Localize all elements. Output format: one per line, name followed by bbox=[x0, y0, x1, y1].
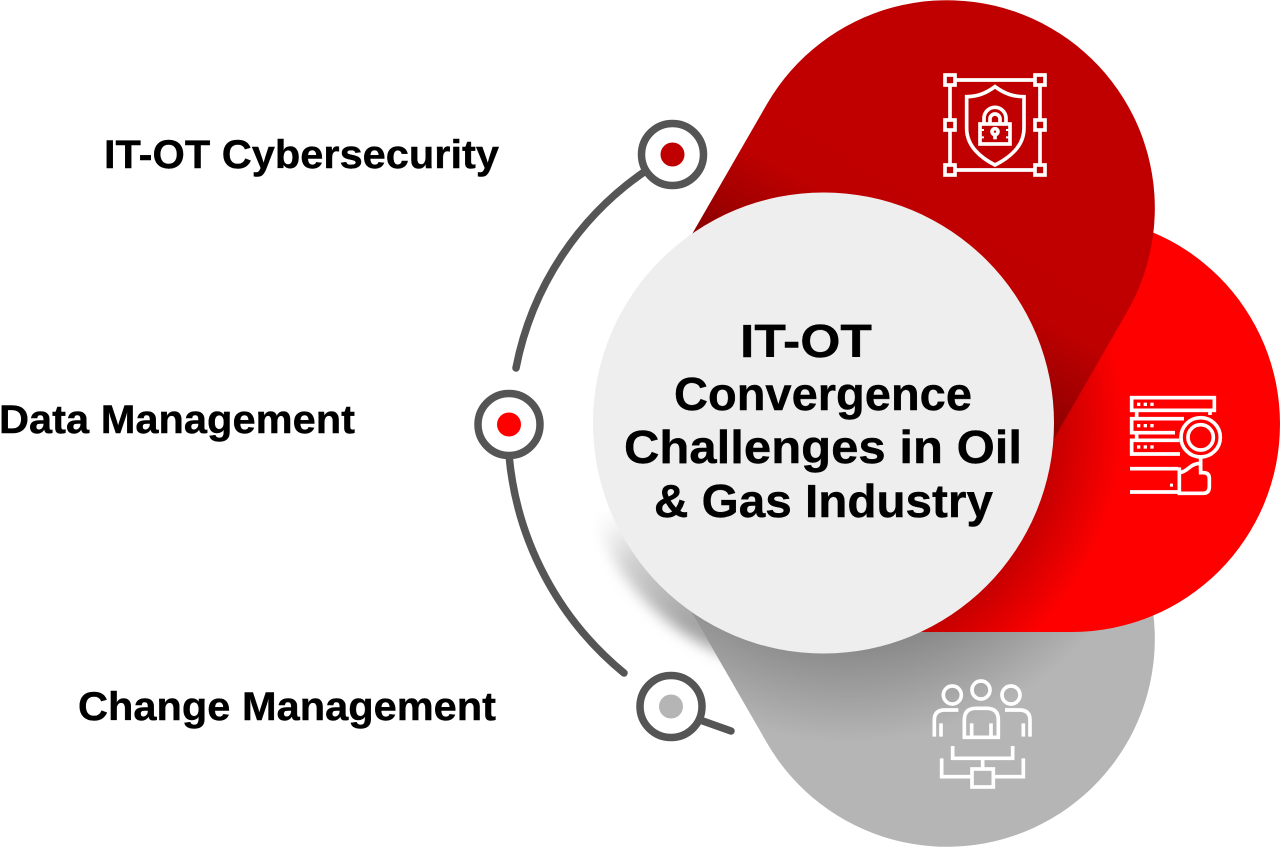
central circle shadow bbox=[604, 522, 720, 662]
marker: change management bbox=[640, 676, 702, 738]
connector arc: upper bbox=[516, 170, 647, 368]
title: Convergence bbox=[674, 368, 972, 420]
title bbox=[624, 315, 1022, 527]
icon: shield with lock bbox=[945, 75, 1045, 175]
panel: central circle bbox=[593, 192, 1054, 654]
label: IT-OT Cybersecurity: IT-OT Cybersecurity bbox=[104, 133, 500, 177]
panel: bright red capsule bbox=[880, 216, 1280, 632]
marker: data management bbox=[478, 394, 540, 456]
connector arc: lower bbox=[509, 455, 624, 673]
label: Change Management: Change Management bbox=[78, 685, 496, 729]
marker: cybersecurity bbox=[642, 124, 704, 186]
title: Challenges in Oil bbox=[624, 421, 1022, 473]
panel: dark red capsule bbox=[680, 0, 1155, 463]
icon: team with org chart bbox=[934, 681, 1030, 787]
panel: gray capsule bbox=[680, 384, 1155, 847]
connector stub: bottom marker bbox=[700, 720, 731, 731]
title: & Gas Industry bbox=[654, 475, 993, 527]
label: Data Management: Data Management bbox=[0, 398, 355, 442]
icon: servers with magnifier bbox=[1130, 398, 1220, 493]
title: IT-OT bbox=[740, 315, 872, 367]
